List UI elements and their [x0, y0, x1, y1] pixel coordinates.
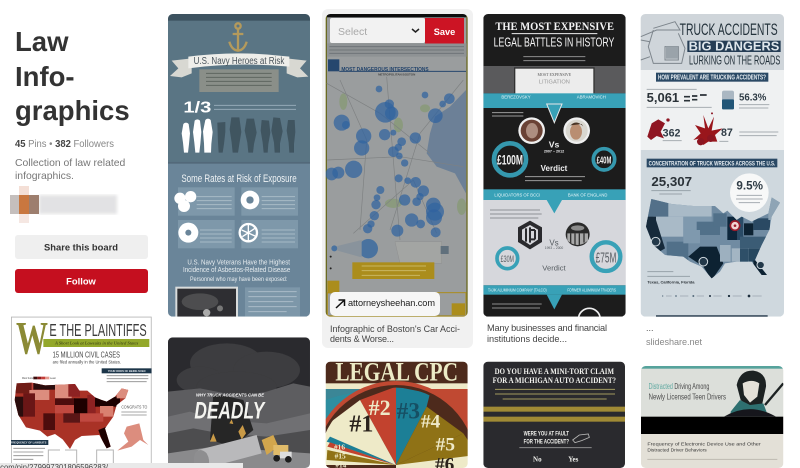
map infographic darkened	[325, 14, 468, 317]
subtitle ribbon	[43, 339, 149, 347]
silhouettes of people	[182, 117, 295, 153]
light section verdict: Verdict	[542, 263, 567, 272]
map title: METROPOLITAN BOSTON	[378, 73, 415, 77]
pin: Deadly truck accidents	[168, 337, 310, 468]
board stats: 45 Pins • 382 Followers	[15, 139, 114, 150]
pin caption: Infographic of Boston's Car Acci-	[330, 324, 460, 334]
logo and building	[518, 221, 590, 249]
pin caption: ...	[646, 323, 654, 333]
dark road band	[641, 417, 783, 434]
pin card: Boston car accidents	[322, 9, 473, 348]
pipe	[194, 435, 262, 468]
landscape layers	[168, 383, 310, 468]
light section verdict: Vs	[549, 238, 559, 247]
question: WERE YOU AT FAULT	[524, 431, 569, 437]
map legend	[662, 295, 762, 297]
callout: lower banner	[10, 440, 48, 459]
pin: Michigan mini-tort	[483, 362, 625, 468]
rank labels: #2	[369, 395, 391, 420]
map title: MOST DANGEROUS INTERSECTIONS	[341, 67, 429, 73]
button: follow	[15, 269, 148, 293]
section banner: prevalence	[656, 73, 768, 82]
statistic: civil cases: are filed annually in the United States.	[53, 359, 121, 364]
source link pill	[330, 292, 440, 316]
text: veterans asbestos: Personnel who may have been exposed:	[190, 277, 288, 283]
headline	[649, 381, 726, 402]
source label: slideshare.net	[646, 337, 702, 347]
headline: deadly: DEADLY	[194, 398, 266, 425]
teal band three	[483, 285, 626, 309]
statistic: 87 with blood splat	[693, 112, 778, 145]
ribbon title	[170, 53, 308, 77]
ornamental W: W	[16, 312, 48, 364]
text: veterans asbestos	[183, 258, 290, 283]
teal band one: ABRAMOVICH	[577, 95, 606, 100]
map title	[328, 59, 466, 77]
map legend	[327, 239, 466, 316]
teal band two	[483, 189, 626, 200]
button: save	[425, 18, 464, 44]
button: save: Save	[434, 27, 455, 37]
pin caption: Many businesses and financial	[487, 323, 607, 333]
versus and verdict: 2007 – 2012	[544, 150, 564, 154]
section banner: concentration	[647, 159, 777, 167]
rank labels: #1	[349, 412, 373, 438]
infographic title: LEGAL BATTLES IN HISTORY	[494, 35, 614, 50]
subheading: Frequency of Electronic Device Use and Other	[647, 442, 761, 447]
rank labels	[349, 395, 455, 468]
infographic title	[494, 22, 614, 46]
heading: rates at risk: Some Rates at Risk of Exposure	[181, 173, 297, 185]
pin caption	[330, 324, 460, 344]
headline: DO YOU HAVE A MINI-TORT CLAIM	[495, 367, 614, 376]
small rank labels: #16	[334, 442, 345, 451]
statistic: 56.3%	[722, 91, 769, 109]
statistic: 5,061	[647, 89, 712, 107]
ribbon title: U.S. Navy Heroes at Risk	[194, 56, 284, 67]
archive photo	[175, 287, 238, 317]
pie wheel	[320, 387, 477, 468]
portraits and amounts: £40M	[597, 155, 611, 166]
headline	[493, 367, 616, 385]
tagline: WHY TRUCK ACCIDENTS CAN BE	[196, 393, 264, 398]
teal band one	[483, 93, 626, 123]
callout text: CONGRATS TO	[121, 405, 147, 411]
statistic: civil cases: 15 MILLION CIVIL CASES	[53, 349, 120, 359]
select dropdown	[330, 18, 425, 43]
intro text	[495, 389, 615, 399]
portraits and amounts: £100M	[497, 152, 523, 168]
infographic title: BIG DANGERS	[689, 40, 779, 54]
teal band three: FORMER ALUMINIUM TRADERS	[567, 288, 616, 293]
board description: infographics.	[15, 171, 74, 182]
infographic title	[680, 24, 781, 64]
text: top states	[647, 272, 695, 285]
subheading	[647, 442, 761, 453]
map legend: Least	[50, 377, 56, 380]
heading: board title: Info-	[15, 61, 75, 92]
report card	[514, 67, 595, 94]
pin: truck accidents	[641, 14, 784, 347]
road stripes	[483, 407, 625, 422]
heading: board title: Law	[15, 26, 69, 57]
button: share this board	[15, 235, 148, 259]
statistic: civil cases	[53, 349, 121, 364]
accident hotspots	[325, 86, 455, 237]
pixelated owner avatar and name	[10, 186, 117, 223]
button: follow: Follow	[66, 276, 97, 286]
map of Alaska	[117, 423, 148, 451]
map legend: Most Suits	[22, 377, 34, 380]
button: share this board: Share this board	[44, 242, 118, 252]
teal band three: TAJIK ALUMINIUM COMPANY (TALCO)	[488, 288, 547, 293]
statistic: 1/3: 1/3	[183, 100, 211, 117]
answer options: Yes	[568, 456, 579, 464]
answer options	[533, 456, 579, 464]
heading: board title: graphics	[15, 95, 130, 126]
question: FOR THE ACCIDENT?	[524, 440, 569, 446]
pin: Legal CPC	[312, 358, 480, 468]
headline: Newly Licensed Teen Drivers	[649, 392, 726, 402]
pin: U.S. Navy Heroes at Risk	[168, 14, 310, 317]
statistic: 9.5% callout	[730, 173, 769, 212]
text: veterans asbestos: Incidence of Asbestos-Related Disease	[183, 265, 290, 274]
infographic title: LEGAL CPC	[335, 358, 458, 387]
statistic: 25,307	[651, 177, 692, 194]
hover card background	[322, 9, 473, 348]
icon: anchor	[229, 23, 247, 51]
light section amounts	[497, 242, 620, 271]
browser status bar	[0, 463, 243, 468]
infographic title: THE MOST EXPENSIVE	[495, 19, 614, 33]
light section amounts: £30M	[501, 254, 514, 264]
text: veterans asbestos: U.S. Navy Veterans Have the Highest	[187, 258, 290, 267]
portraits and amounts	[494, 117, 615, 175]
headline: FOR A MICHIGAN AUTO ACCIDENT?	[493, 376, 616, 385]
light section amounts: £75M	[596, 250, 616, 266]
rank labels: #5	[436, 435, 455, 456]
panel: board sidebar	[10, 26, 148, 293]
smoke cloud	[177, 343, 300, 402]
versus and verdict	[540, 142, 568, 171]
statistic: 362 with blood splat	[647, 118, 682, 141]
pin: distracted driving	[641, 366, 783, 468]
teal band one: BEREZOVSKY	[501, 95, 531, 100]
versus and verdict: Vs	[549, 139, 559, 149]
subheading: Distracted Driver Behaviors	[647, 448, 707, 453]
choropleth map of US	[13, 380, 130, 450]
teal band two: BANK OF ENGLAND	[568, 193, 607, 198]
map base and water	[427, 90, 466, 193]
illustration: teen driver	[724, 371, 783, 417]
truck	[262, 435, 292, 463]
board description: Collection of law related	[15, 158, 126, 169]
callout banner: YOUR ODDS OF BEING SUED	[108, 369, 146, 373]
statistic: 362 with blood splat: 362	[663, 128, 681, 140]
flames	[210, 419, 246, 442]
outer rings	[312, 381, 480, 468]
pin caption: institutions decide...	[487, 334, 567, 344]
teal band two: LIQUIDATORS OF BCCI	[494, 193, 540, 198]
pin: We the Plaintiffs	[10, 312, 152, 468]
versus and verdict: Verdict	[541, 164, 568, 173]
infographic title: E THE PLAINTIFFS	[49, 320, 147, 340]
rank labels: #4	[421, 411, 441, 432]
light section verdict: 1993 – 2000	[545, 246, 563, 250]
question	[524, 431, 569, 446]
statistic: 25,307: 25,307	[651, 174, 692, 189]
truck line drawing	[641, 22, 685, 63]
text: top states: Texas, California, Florida	[647, 280, 695, 285]
select dropdown: Select	[338, 26, 367, 38]
board description	[15, 158, 126, 182]
icon: car	[573, 434, 589, 443]
callout text	[121, 405, 147, 415]
answer options: No	[533, 456, 542, 464]
map markers	[651, 221, 764, 269]
pin: most expensive legal battles	[483, 14, 626, 344]
headline: Distracted Driving Among	[649, 381, 709, 391]
statistic: 5,061: 5,061	[647, 90, 679, 105]
pin caption	[487, 323, 607, 344]
small rank labels	[334, 442, 347, 468]
report card: MOST EXPENSIVE	[537, 72, 572, 77]
statistic: 9.5% callout: 9.5%	[736, 180, 764, 193]
callout banner	[102, 368, 152, 382]
statistic: 87 with blood splat: 87	[721, 127, 733, 139]
source link pill: attorneysheehan.com	[348, 298, 435, 308]
statistic: 56.3%: 56.3%	[739, 93, 767, 104]
rank labels: #3	[397, 398, 420, 424]
light section verdict	[542, 238, 567, 272]
map legend	[22, 377, 56, 380]
subtitle ribbon: A Short Look at Lawsuits in the United States	[54, 341, 139, 346]
callout: lower banner: FREQUENCY OF LAWSUITS	[11, 441, 47, 445]
risk tiles with icons	[174, 187, 298, 248]
small rank labels: #15	[335, 451, 346, 460]
pin caption: dents & Worse...	[330, 334, 394, 344]
report card: LITIGATION	[539, 80, 570, 86]
heading: board title	[15, 26, 130, 126]
choropleth map of US	[643, 197, 783, 280]
